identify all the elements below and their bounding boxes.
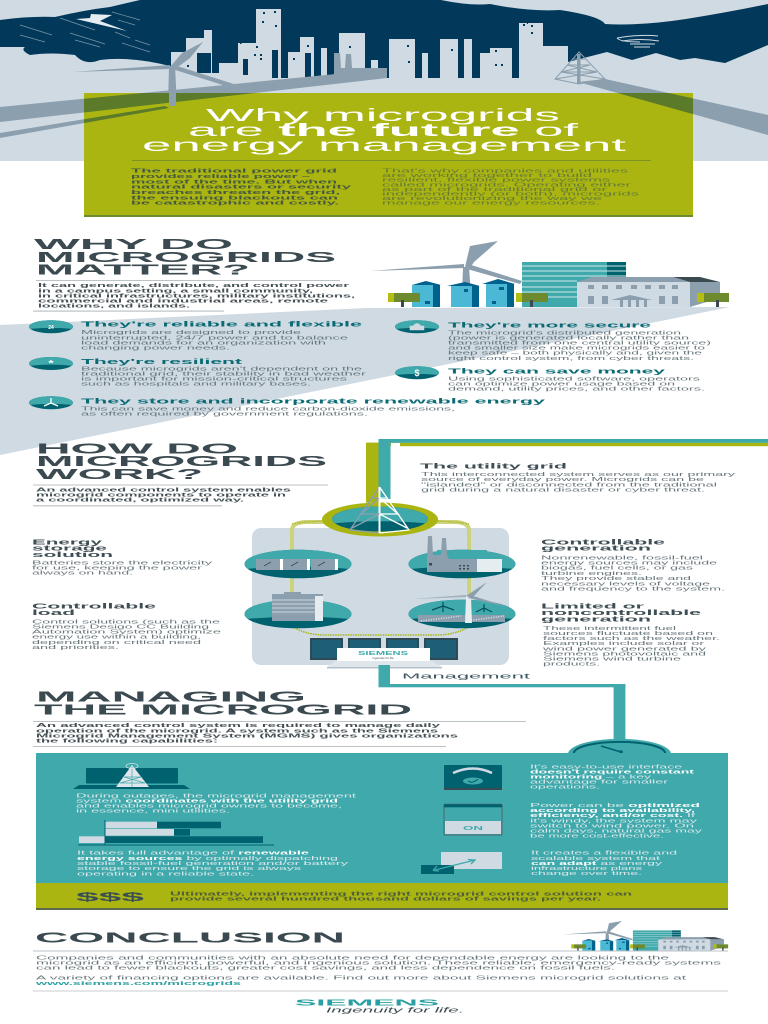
- item: save money: demand, utility prices, and other factors.: [448, 387, 706, 393]
- icon: on switch: ON: [463, 826, 483, 832]
- factory silhouette: [334, 53, 387, 78]
- text: controllable generation: [541, 539, 726, 592]
- text: coordinates with the utility grid: system coordinates with the utility grid: [76, 798, 339, 804]
- title: are the future of: [188, 120, 578, 140]
- managing intro text: Microgrid Management System (MGMS) gives organizations: [36, 733, 458, 739]
- savings banner: Ultimately, implementing the right microgrid control solution can: [170, 892, 634, 898]
- text: constant monitoring: monitoring – a key: [530, 774, 651, 780]
- text: controllable load: Control solutions (such as the: [32, 619, 220, 625]
- intro right: called microgrids. Operating either: [382, 182, 632, 188]
- icon: tablet gauge: [444, 765, 502, 790]
- lattice tower: [555, 52, 605, 84]
- item: more secure: transmitted from one central utility source): [448, 341, 711, 347]
- item: more secure: and smaller size make microgrids easier to: [448, 346, 705, 352]
- text: optimized power: switch to wind power. On: [530, 823, 694, 829]
- heading: managing the microgrid: MANAGING: [36, 689, 306, 706]
- item: resilient: is important for mission-critical structures: [81, 377, 348, 383]
- intro right: are working together to build: [382, 173, 592, 179]
- connector line: management: Management: [402, 671, 530, 680]
- why intro text: in critical infrastructures, military institutions,: [38, 293, 356, 299]
- text: optimized power: it's windy, the system may: [530, 818, 697, 824]
- text: energy storage: storage: [32, 546, 107, 553]
- panel: capabilities: [36, 753, 728, 883]
- dark storm sky: [0, 0, 768, 78]
- item: reliable and flexible: They're reliable and flexible: [81, 320, 362, 329]
- heading: why do microgrids matter: MATTER?: [36, 262, 250, 279]
- illustration: campus with turbine: [370, 241, 729, 307]
- text: energy storage: always on hand.: [32, 571, 134, 577]
- text: optimized power: calm days, natural gas may: [530, 828, 702, 834]
- text: can adapt: can adapt as energy: [531, 861, 662, 867]
- connector lines: utility grid: [366, 439, 768, 503]
- how intro text: microgrid components to operate in: [36, 493, 287, 499]
- text: the utility grid: grid during a natural disaster or cyber threat.: [421, 487, 706, 493]
- icon: scaling screens: [421, 852, 502, 874]
- item: resilient: traditional grid, their stability in bad weather: [81, 372, 366, 378]
- managing intro text: operation of the microgrid. A system such as the Siemens: [36, 728, 438, 734]
- item: reliable and flexible: uninterrupted, 24/7 power and to balance: [81, 335, 348, 341]
- text: coordinates with the utility grid: [76, 793, 357, 815]
- text: energy storage: solution: [32, 552, 113, 559]
- text: renewable energy sources: stable fossil-fuel generation and/or battery: [77, 861, 349, 867]
- text: limited generation: Examples include solar or: [543, 641, 704, 647]
- node: renewable generation: [408, 582, 516, 628]
- why intro text: in a campus setting, a small community,: [38, 288, 314, 294]
- logo: Siemens: Ingenuity for life.: [326, 1008, 464, 1015]
- text: limited generation: [540, 604, 721, 667]
- text: can adapt: change over time.: [531, 871, 643, 877]
- text: constant monitoring: [530, 764, 694, 790]
- text: coordinates with the utility grid: and enables microgrid owners to become,: [76, 803, 343, 809]
- text: controllable generation: biogas, fuel cells, or gas: [541, 566, 693, 572]
- conclusion text: microgrid as an efficient, powerful, and ingenious solution. These reliable, emergency-ready systems: [36, 961, 722, 967]
- text: controllable generation: generation: [541, 546, 651, 553]
- conclusion text: [33, 955, 722, 987]
- text: limited generation: products.: [543, 661, 601, 667]
- why intro text: locations, and islands.: [38, 303, 191, 309]
- text: limited generation: factors such as the weather.: [543, 636, 721, 642]
- item: reliable and flexible: [29, 320, 362, 351]
- heading: why do microgrids matter: [34, 236, 336, 279]
- top node: tower: [322, 487, 438, 536]
- intro left: breaches threaten the grid,: [131, 190, 341, 196]
- node: controllable load: [244, 592, 352, 628]
- text: constant monitoring: doesn't require constant: [530, 769, 694, 775]
- title: [142, 105, 626, 155]
- text: energy storage: Batteries store the electricity: [32, 561, 213, 567]
- logo: Siemens: SIEMENS: [295, 997, 440, 1007]
- text: renewable energy sources: energy sources by optimally dispatching: [77, 856, 338, 862]
- item: more secure: They're more secure: [448, 320, 651, 329]
- item: more secure: right control system, from cyber threats.: [448, 356, 695, 362]
- item: save money: can optimize power usage based on: [448, 382, 675, 388]
- wind turbine: [73, 42, 240, 107]
- text: the utility grid: This interconnected system serves as our primary: [421, 472, 736, 478]
- node: management console: Ingenuity for life: [372, 656, 394, 660]
- lightning bolt: [76, 14, 127, 31]
- icon: laptop with tower: [73, 764, 190, 789]
- text: renewable energy sources: [77, 851, 349, 877]
- text: controllable generation: turbine engines.: [541, 571, 643, 577]
- item: renewable energy: They store and incorporate renewable energy: [81, 396, 548, 405]
- item: reliable and flexible: 24: [48, 325, 54, 331]
- text: constant monitoring: It's easy-to-use interface: [530, 764, 682, 770]
- text: controllable load: depending on critical need: [32, 640, 201, 646]
- text: controllable load: and priorities.: [32, 645, 120, 651]
- text: the utility grid: "islanded" or disconnected from the traditional: [421, 482, 717, 488]
- item: more secure: (power is generated locally rather than: [448, 336, 689, 342]
- item: resilient: [29, 357, 366, 388]
- text: can adapt: infrastructure plans: [531, 866, 642, 872]
- item: renewable energy: as often required by government regulations.: [81, 412, 369, 418]
- item: save money: [395, 366, 706, 393]
- connectors: [292, 521, 470, 635]
- intro right: [382, 168, 640, 207]
- item: renewable energy: This can save money and reduce carbon-dioxide emissions,: [81, 407, 456, 413]
- item: save money: Using sophisticated software, operators: [448, 377, 700, 383]
- why intro text: It can generate, distribute, and control power: [38, 283, 351, 289]
- text: controllable generation: They provide stable and: [541, 576, 691, 582]
- conclusion text: can lead to fewer blackouts, greater cost savings, and less dependence on fossil fuels.: [36, 966, 616, 972]
- intro right: independently (or both), microgrids: [382, 192, 640, 198]
- light background wedge: [0, 307, 730, 455]
- text: controllable load: [32, 604, 221, 651]
- title: energy management: [142, 135, 626, 155]
- intro left: natural disasters or security: [131, 185, 353, 191]
- text: limited generation: sources fluctuate based on: [543, 631, 713, 637]
- city skyline: [171, 9, 568, 78]
- heading: managing the microgrid: [34, 689, 412, 718]
- managing intro text: An advanced control system is required to manage daily: [36, 723, 442, 729]
- text: controllable generation: Nonrenewable, fossil-fuel: [541, 556, 703, 562]
- text: the utility grid: source of everyday power. Microgrids can be: [421, 477, 704, 483]
- icon: on switch: [444, 804, 502, 835]
- text: controllable generation: Controllable: [541, 539, 665, 546]
- text: limited generation: noncontrollable: [541, 610, 701, 617]
- text: controllable load: Automation System) optimize: [32, 630, 221, 636]
- text: optimized power: efficiency, and/or cost. If: [530, 813, 696, 819]
- heading: conclusion: CONCLUSION: [35, 929, 345, 946]
- text: controllable generation: necessary levels of voltage: [541, 581, 710, 587]
- node: controllable generation: [408, 536, 516, 578]
- heading: how do microgrids work: MICROGRIDS: [36, 453, 327, 470]
- item: save money: $: [414, 368, 420, 378]
- item: save money: They can save money: [448, 366, 668, 375]
- connector line: management: [378, 665, 626, 742]
- text: controllable generation: energy sources may include: [541, 561, 717, 567]
- node: management console: SIEMENS: [358, 651, 409, 657]
- conclusion text: A variety of financing options are available. Find out more about Siemens microgrid solutions at: [36, 976, 687, 982]
- text: limited generation: wind power generated by: [540, 646, 706, 652]
- text: can adapt: [531, 851, 677, 877]
- text: the utility grid: The utility grid: [420, 463, 567, 470]
- beam shadows: [0, 69, 387, 122]
- text: energy storage: [32, 539, 213, 577]
- text: limited generation: Siemens wind turbine: [543, 656, 681, 662]
- text: controllable load: energy use within a building,: [32, 635, 202, 641]
- item: reliable and flexible: changing power needs.: [81, 345, 231, 351]
- heading: how do microgrids work: HOW DO: [36, 440, 239, 457]
- savings banner: provide several hundred thousand dollars of savings per year.: [170, 896, 602, 902]
- conclusion text: Companies and communities with an absolute need for dependable energy are looking to the: [36, 955, 669, 961]
- intro left: provides reliable power –: [131, 174, 310, 180]
- text: renewable energy sources: It takes full advantage of renewable: [77, 851, 309, 857]
- savings banner: $$$: [76, 890, 145, 904]
- text: constant monitoring: operations.: [530, 784, 601, 790]
- item: resilient: They're resilient: [81, 357, 244, 366]
- heading: managing the microgrid: THE MICROGRID: [34, 701, 412, 718]
- text: renewable energy sources: operating in a reliable state.: [77, 871, 255, 877]
- item: renewable energy: [29, 396, 548, 418]
- how intro text: [36, 487, 291, 504]
- intro left: [131, 169, 353, 207]
- text: renewable energy sources: storage to ensure the grid is always: [77, 866, 301, 872]
- text: can adapt: scalable system that: [531, 856, 661, 862]
- intro right: as part of the traditional grid or: [382, 187, 608, 193]
- text: constant monitoring: advantage for smaller: [530, 779, 668, 785]
- text: optimized power: Power can be optimized: [530, 803, 702, 809]
- text: energy storage: Energy: [32, 539, 102, 546]
- microgrid diagram: [244, 487, 516, 668]
- swirl: [617, 35, 659, 47]
- hero illustration: stormy city skyline: [0, 0, 768, 161]
- text: controllable load: Siemens Desigo CC Building: [32, 625, 209, 631]
- illustration: small campus: [563, 921, 728, 951]
- text: optimized power: [530, 803, 702, 839]
- how intro text: An advanced control system enables: [36, 487, 291, 493]
- text: optimized power: be more cost-effective.: [530, 833, 665, 839]
- title: Why microgrids: [206, 105, 561, 125]
- node: energy storage: [244, 550, 352, 578]
- managing intro text: the following capabilities:: [36, 739, 218, 745]
- item: more secure: keep safe – both physically and, given the: [448, 351, 702, 357]
- conclusion text: www.siemens.com/microgrids: [33, 981, 241, 987]
- node: management console: [310, 638, 458, 668]
- text: limited generation: Siemens photovoltaic and: [543, 651, 706, 657]
- item: reliable and flexible: load demands for an organization with: [81, 340, 326, 346]
- heading: how do microgrids work: [36, 440, 327, 483]
- text: optimized power: according to availability,: [530, 808, 696, 814]
- intro right: are revolutionizing the way we: [382, 196, 602, 202]
- heading: how do microgrids work: WORK?: [36, 466, 203, 483]
- text: energy storage: for use, keeping the power: [32, 566, 202, 572]
- heading: why do microgrids matter: WHY DO: [34, 236, 234, 253]
- text: controllable load: Controllable: [32, 604, 156, 611]
- text: limited generation: These intermittent fuel: [543, 626, 676, 632]
- why intro text: commercial and industrial areas, remote: [38, 298, 328, 304]
- bar chart: [78, 820, 274, 845]
- title panel: [84, 93, 693, 217]
- managing intro text: [36, 723, 458, 745]
- text: limited generation: Limited or: [541, 604, 645, 611]
- text: the utility grid: [420, 463, 736, 493]
- item: more secure: [395, 320, 711, 362]
- item: resilient: such as hospitals and military bases.: [81, 382, 312, 388]
- item: reliable and flexible: Microgrids are designed to provide: [81, 330, 301, 336]
- intro left: be catastrophic and costly.: [131, 201, 340, 207]
- text: limited generation: generation: [541, 616, 651, 623]
- item: resilient: Because microgrids aren't dependent on the: [81, 367, 362, 373]
- intro left: most of the time. But when: [131, 179, 338, 185]
- icon: gauge: [568, 739, 671, 754]
- text: coordinates with the utility grid: in essence, mini utilities.: [76, 809, 231, 815]
- intro right: That's why companies and utilities: [382, 168, 629, 174]
- text: coordinates with the utility grid: During outages, the microgrid management: [76, 793, 357, 799]
- how intro text: a coordinated, optimized way.: [36, 498, 245, 504]
- intro right: manage our energy resources.: [382, 201, 600, 207]
- heading: why do microgrids matter: MICROGRIDS: [36, 249, 336, 266]
- intro right: resilient, flexible power systems: [382, 178, 611, 184]
- why intro text: [38, 283, 356, 309]
- item: more secure: The microgrid's distributed generation: [448, 331, 681, 337]
- text: controllable load: load: [32, 610, 75, 617]
- rain streaks: [20, 12, 150, 52]
- text: can adapt: It creates a flexible and: [531, 851, 677, 857]
- intro left: The traditional power grid: [131, 169, 339, 175]
- savings banner: [36, 883, 728, 910]
- logo: Siemens: [295, 997, 464, 1015]
- text: controllable generation: and frequency to the system.: [541, 586, 726, 592]
- intro left: the ensuing blackouts can: [131, 195, 339, 201]
